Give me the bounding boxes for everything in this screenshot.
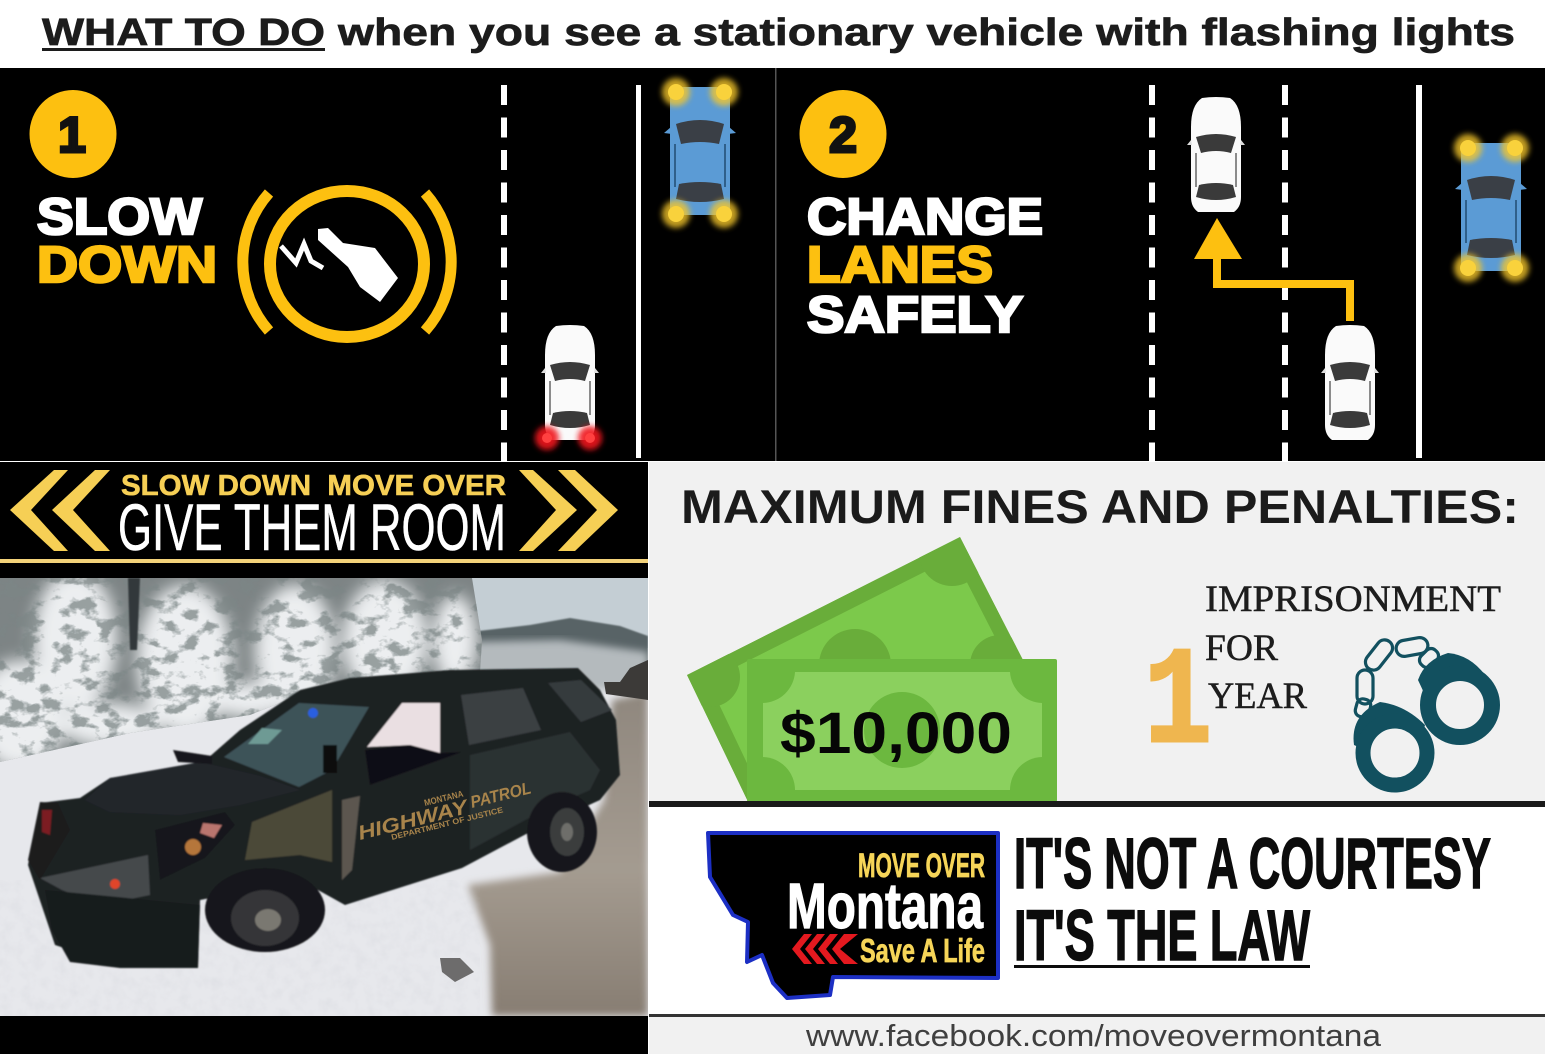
bottom black strip (0, 1016, 648, 1054)
road debris (440, 958, 474, 982)
door lettering: PATROL (468, 778, 533, 812)
banner text: GIVE THEM ROOM (118, 490, 506, 564)
back bill (687, 537, 1022, 800)
number badge 2 (800, 90, 886, 178)
tail bumper debris (40, 855, 150, 905)
divider bar (649, 1014, 1545, 1017)
panel: step 1 slow down (0, 68, 775, 461)
icon: stationary blue car (1454, 134, 1529, 282)
heading: MAXIMUM FINES AND PENALTIES: (681, 480, 1519, 533)
heading: slow down (37, 188, 217, 293)
icon: white car moved over (1187, 97, 1245, 212)
mirror (323, 745, 337, 773)
icon: cash bills: $10,000 (780, 701, 1012, 766)
panel: step 2 change lanes (775, 68, 1545, 461)
icon: white car before lane change (1321, 325, 1379, 440)
penalty: imprisonment text: 1 (1144, 627, 1212, 783)
panel: it's the law (708, 825, 1491, 998)
number badge 1 (30, 90, 116, 178)
rear window (548, 680, 612, 722)
banner text (118, 470, 506, 564)
slogan: IT'S THE LAW (1014, 897, 1310, 976)
heading: change lanes safely: CHANGE (807, 188, 1043, 245)
snowy forest (0, 570, 490, 770)
banner text: SLOW DOWN MOVE OVER (121, 470, 506, 502)
title: when you see a stationary vehicle with flashing lights (337, 12, 1515, 54)
rear door window (461, 688, 541, 745)
photo: crashed highway patrol vehicle (0, 570, 648, 1016)
windshield (224, 703, 369, 787)
penalty: imprisonment text: YEAR (1208, 676, 1307, 717)
slogan (1014, 825, 1491, 976)
footer: facebook url (649, 1017, 1545, 1054)
penalty: imprisonment text: IMPRISONMENT (1205, 579, 1501, 620)
patrol car (28, 668, 620, 968)
door lettering: MONTANA (423, 788, 465, 808)
heading: slow down: SLOW (37, 188, 203, 245)
penalty: imprisonment text: FOR (1205, 628, 1278, 669)
hood (102, 762, 202, 786)
icon: cash bills (680, 520, 1057, 802)
door lettering: HIGHWAY (356, 796, 472, 845)
heading: change lanes safely (807, 188, 1043, 343)
footer: facebook url: www.facebook.com/moveovermontana (805, 1018, 1382, 1053)
front wheel (205, 868, 325, 952)
icon: white car braking (535, 325, 602, 450)
logo: move over montana: Save A Life (860, 932, 985, 969)
logo: move over montana: Montana (787, 870, 983, 942)
number badge 2: 2 (829, 107, 857, 163)
icon: right chevrons (519, 470, 618, 551)
heading: change lanes safely: LANES (807, 236, 993, 293)
title: WHAT TO DO (42, 12, 325, 54)
heading: slow down: DOWN (37, 236, 217, 293)
door lettering: DEPARTMENT OF JUSTICE (390, 805, 505, 842)
exposed metal (245, 790, 332, 862)
truck in distance (604, 660, 648, 700)
icon: left chevrons (10, 470, 110, 551)
icon: handcuffs (1354, 636, 1492, 785)
road lane markings (504, 85, 641, 461)
number badge 1: 1 (58, 107, 86, 163)
heading: change lanes safely: SAFELY (807, 286, 1023, 343)
icon: stationary blue car (662, 78, 738, 228)
logo: move over montana: MOVE OVER (858, 847, 985, 885)
title (42, 12, 1515, 54)
rear wheel (527, 792, 597, 872)
body (28, 668, 620, 966)
distant mountain (480, 617, 648, 662)
rear door panel (470, 732, 600, 850)
icon: brake warning (243, 191, 451, 337)
airbag (367, 703, 440, 753)
sky (460, 578, 648, 648)
panel: give them room banner (0, 462, 648, 578)
arrow: lane change (1194, 218, 1350, 321)
road surface (468, 692, 648, 1016)
panel: fines and penalties (649, 462, 1545, 802)
logo: move over montana (708, 833, 998, 998)
penalty: imprisonment text (1144, 579, 1501, 783)
door lettering (360, 782, 531, 840)
road lane markings (1152, 85, 1422, 461)
divider bar (649, 801, 1545, 807)
